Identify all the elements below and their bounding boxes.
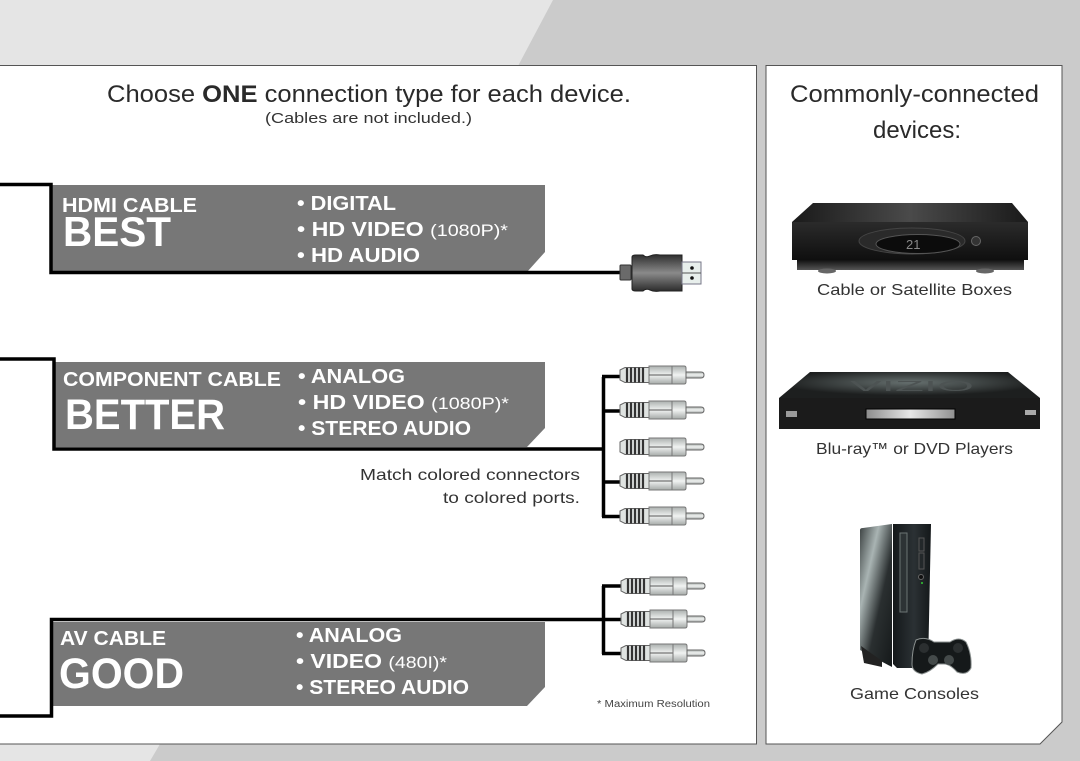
tier: AV good xyxy=(0,577,705,716)
cable line: component xyxy=(0,359,605,517)
footnote: maximum resolution: * Maximum Resolution xyxy=(597,699,710,710)
heading: commonly connected devices: Commonly-connected xyxy=(790,81,1039,108)
icon: blu-ray player: VIZIO xyxy=(850,378,974,395)
plaque: AV xyxy=(53,622,545,706)
panel: devices xyxy=(766,66,1062,744)
features: component: • STEREO AUDIO xyxy=(298,418,471,440)
label: AV cable: AV CABLE xyxy=(60,628,166,650)
label: component cable: COMPONENT CABLE xyxy=(63,369,281,391)
features: component xyxy=(298,366,509,440)
caption: blu-ray or DVD players: Blu-ray™ or DVD Players xyxy=(816,441,1013,458)
panel: connection types xyxy=(0,66,756,744)
icon: blu-ray player xyxy=(779,372,1040,429)
features: HDMI: • HD AUDIO xyxy=(297,245,420,267)
features: HDMI: • HD VIDEO (1080P)* xyxy=(297,219,508,241)
icon: cable box xyxy=(792,203,1028,274)
note: match colored connectors xyxy=(360,467,580,507)
icon: game controller xyxy=(912,638,971,674)
cable line: HDMI xyxy=(0,184,622,272)
icon: cable box: 21 xyxy=(906,237,920,252)
label: HDMI cable: HDMI CABLE xyxy=(62,195,197,217)
features: HDMI xyxy=(297,193,508,267)
icon: game console xyxy=(860,524,971,674)
plaque: component xyxy=(55,362,545,447)
caption: cable or satellite boxes: Cable or Satellite Boxes xyxy=(817,282,1012,299)
plaque: HDMI xyxy=(50,185,545,272)
tier: component better xyxy=(0,359,704,525)
heading: choose one connection: Choose ONE connection type for each device. xyxy=(107,81,631,108)
heading: commonly connected devices: devices: xyxy=(873,117,961,144)
note: match colored connectors: to colored ports. xyxy=(443,490,580,507)
features: component: • HD VIDEO (1080P)* xyxy=(298,392,509,414)
tier: HDMI best xyxy=(0,184,701,291)
rating: best: BEST xyxy=(63,208,171,255)
icon: HDMI connector xyxy=(620,255,701,291)
features: HDMI: • DIGITAL xyxy=(297,193,396,215)
features: AV: • VIDEO (480I)* xyxy=(296,651,447,673)
rating: good: GOOD xyxy=(59,650,184,698)
icon: five RCA connectors xyxy=(620,366,704,525)
caption: game consoles: Game Consoles xyxy=(850,686,979,703)
features: AV: • STEREO AUDIO xyxy=(296,677,469,699)
rating: better: BETTER xyxy=(65,391,225,439)
features: component: • ANALOG xyxy=(298,366,405,388)
note: cables not included: (Cables are not included.) xyxy=(265,110,472,127)
note: match colored connectors: Match colored connectors xyxy=(360,467,580,484)
features: AV xyxy=(296,625,469,699)
cable line: AV xyxy=(0,586,622,716)
features: AV: • ANALOG xyxy=(296,625,402,647)
heading: commonly connected devices xyxy=(790,81,1039,144)
icon: three RCA connectors xyxy=(621,577,705,662)
